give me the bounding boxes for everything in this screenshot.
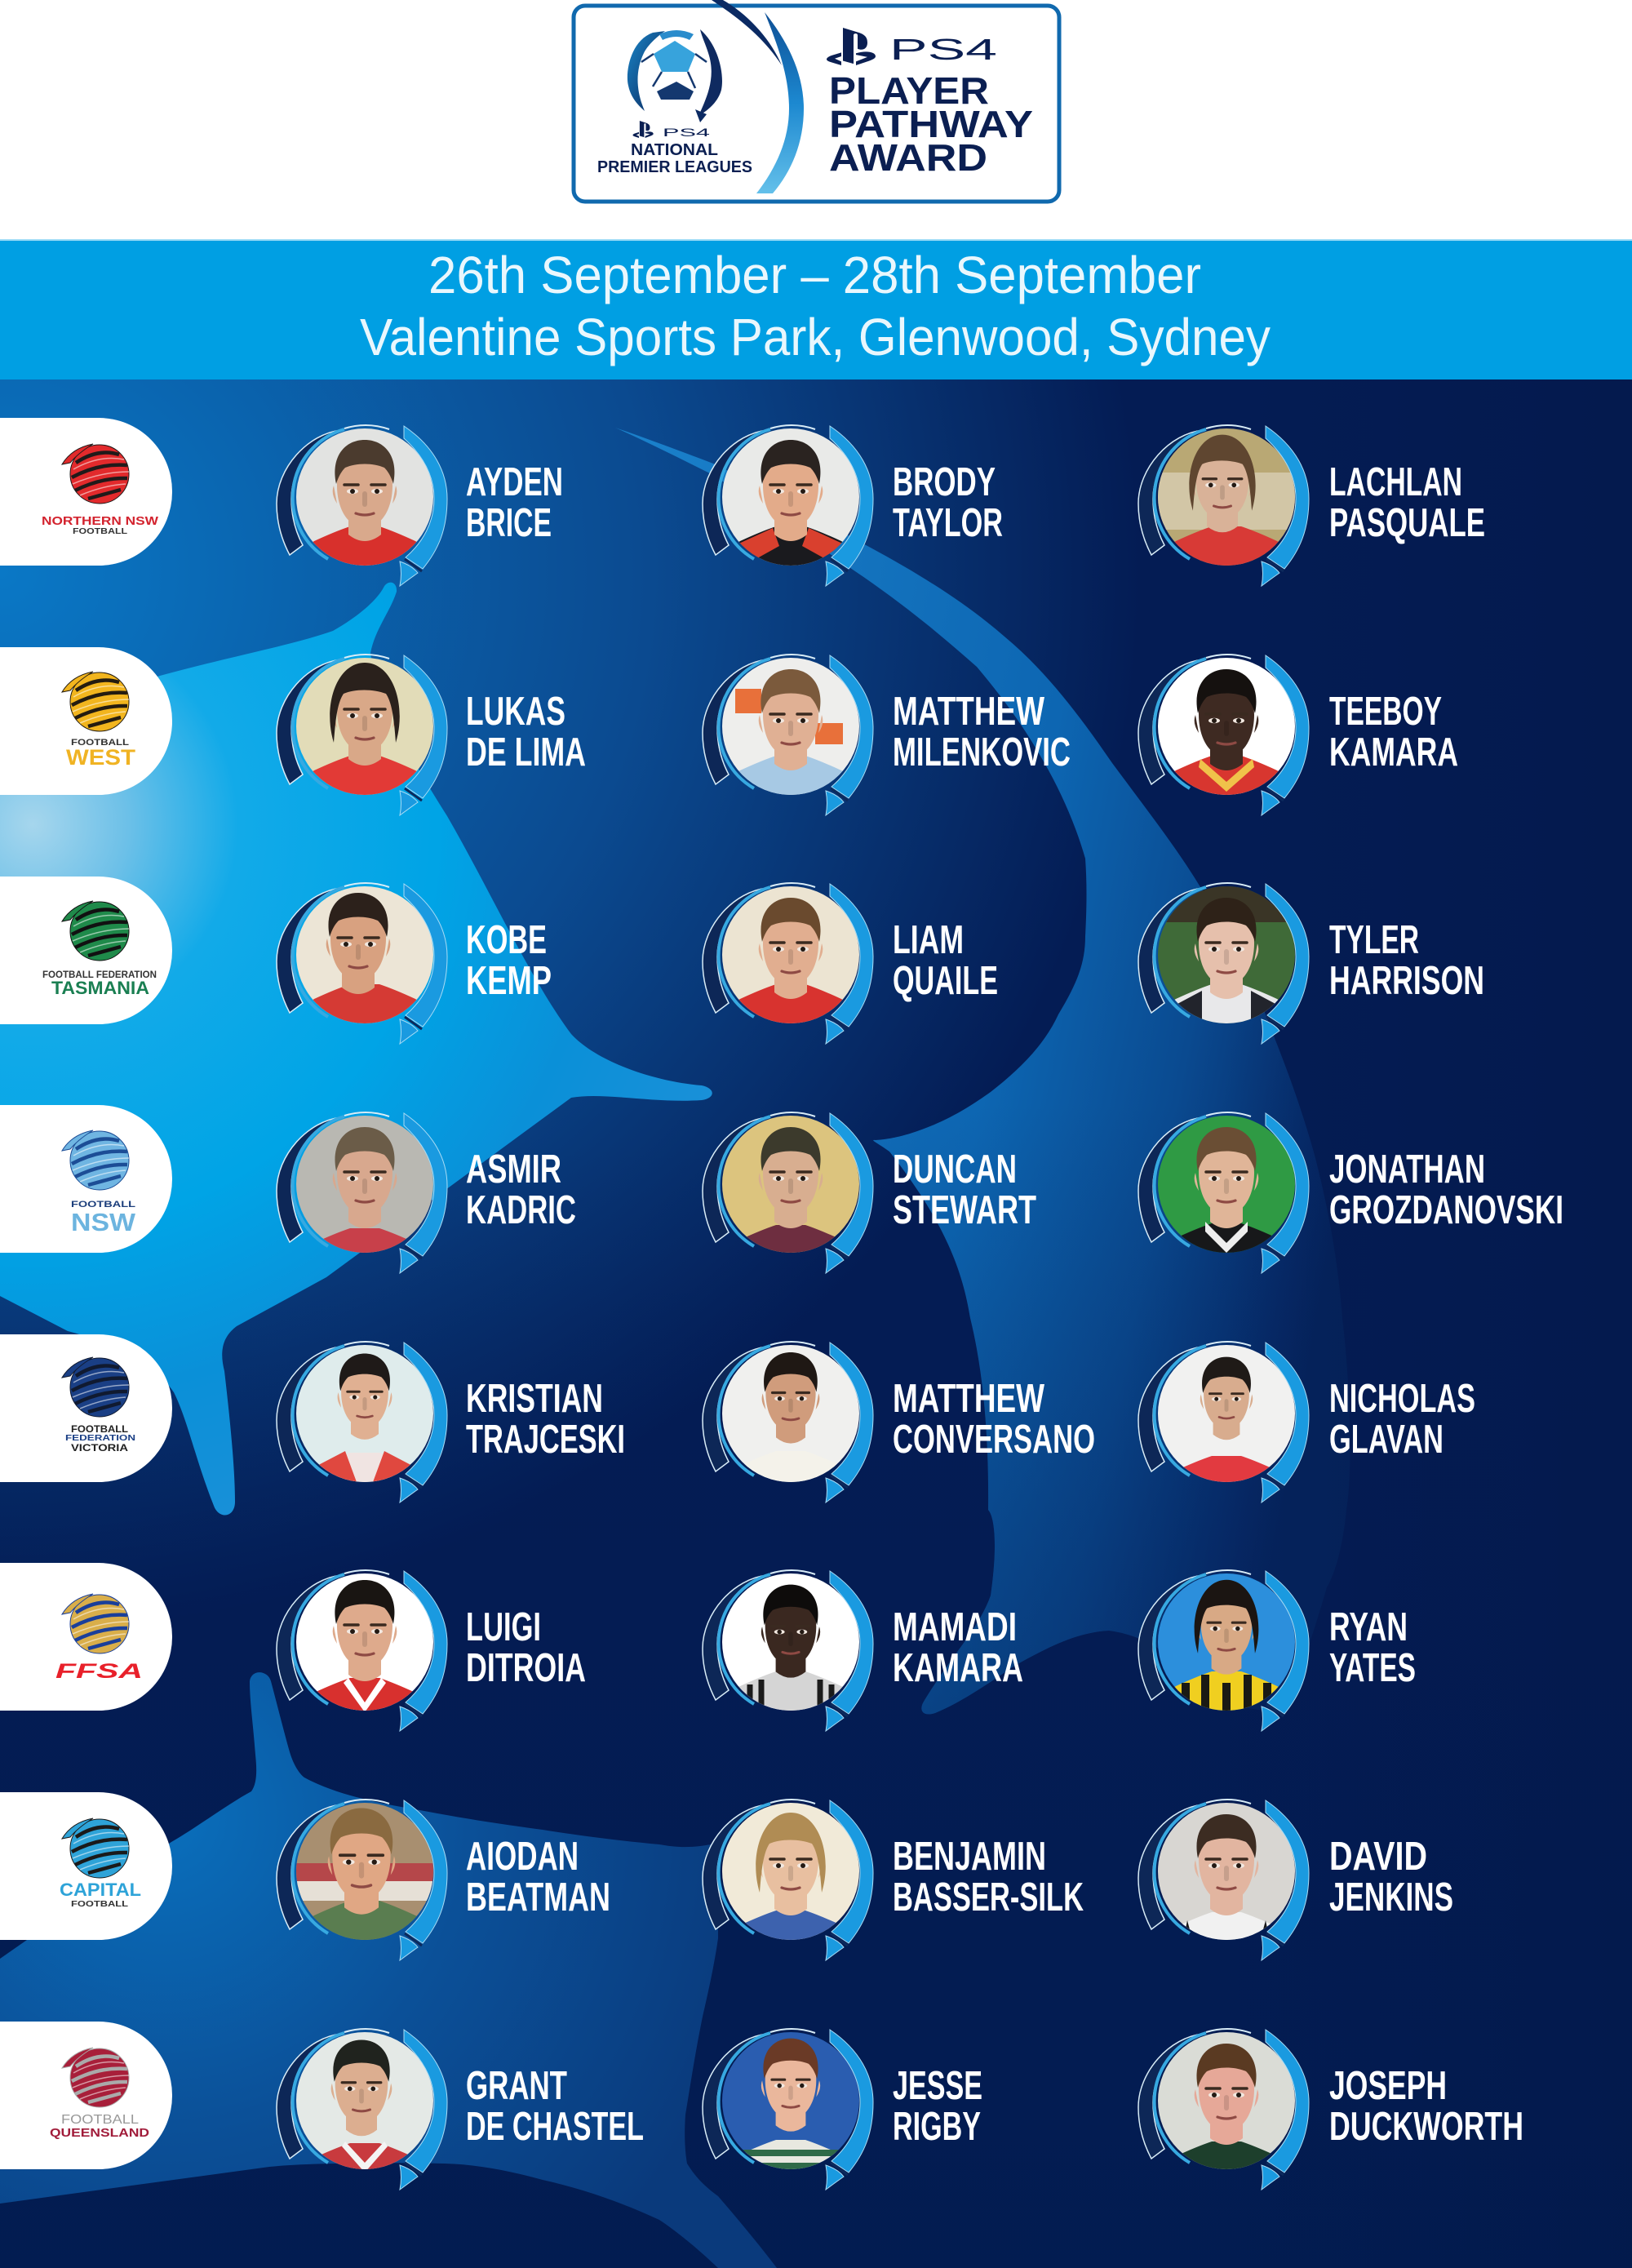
portrait bbox=[277, 424, 447, 586]
player: Joseph Duckworth bbox=[1138, 2027, 1523, 2190]
name: LIAM bbox=[893, 918, 964, 962]
portrait bbox=[703, 1798, 873, 1960]
player: Brody Taylor bbox=[703, 424, 1003, 586]
federation: Football Federation Victoria: FEDERATION bbox=[65, 1434, 135, 1443]
player: Lukas De Lima bbox=[277, 653, 586, 815]
name: MILENKOVIC bbox=[893, 730, 1071, 774]
name bbox=[466, 918, 552, 1003]
player: Lachlan Pasquale bbox=[1138, 424, 1485, 586]
name: KADRIC bbox=[466, 1188, 576, 1232]
portrait bbox=[1138, 653, 1309, 815]
name: MATTHEW bbox=[893, 690, 1045, 734]
player: Jesse Rigby bbox=[703, 2027, 982, 2190]
federation: Northern NSW Football bbox=[0, 418, 172, 566]
federation: Football NSW: FOOTBALL bbox=[71, 1200, 135, 1209]
name: DUNCAN bbox=[893, 1147, 1017, 1192]
player: Tyler Harrison bbox=[1138, 881, 1484, 1044]
name bbox=[466, 2064, 644, 2149]
federation: Northern NSW Football: NORTHERN NSW bbox=[42, 514, 159, 528]
name bbox=[1329, 460, 1485, 545]
name: QUAILE bbox=[893, 959, 998, 1003]
name: LUKAS bbox=[466, 690, 565, 734]
name: AYDEN bbox=[466, 460, 563, 504]
federation: Football Federation Victoria: FOOTBALL bbox=[71, 1423, 128, 1435]
PS4 brand mark: PS4 bbox=[889, 33, 997, 66]
text: National Premier Leagues: PREMIER LEAGUES bbox=[597, 158, 752, 176]
name bbox=[1329, 2064, 1523, 2149]
portrait bbox=[1138, 1111, 1309, 1273]
player: Liam Quaile bbox=[703, 881, 998, 1044]
NPL PS4 mini logo: PS4 bbox=[663, 126, 710, 139]
name bbox=[893, 2064, 982, 2149]
name: HARRISON bbox=[1329, 959, 1484, 1003]
name: STEWART bbox=[893, 1188, 1036, 1232]
portrait bbox=[277, 881, 447, 1044]
federation: Football Federation Tasmania: TASMANIA bbox=[51, 978, 149, 998]
federation: Capital Football: CAPITAL bbox=[60, 1880, 141, 1900]
player: Aiodan Beatman bbox=[277, 1798, 610, 1960]
name: TYLER bbox=[1329, 918, 1419, 962]
name: YATES bbox=[1329, 1646, 1416, 1690]
white header background bbox=[0, 0, 1632, 240]
award title: PATHWAY bbox=[829, 103, 1033, 145]
name bbox=[466, 1377, 625, 1462]
name: ASMIR bbox=[466, 1147, 561, 1192]
name: GRANT bbox=[466, 2064, 567, 2108]
name: GLAVAN bbox=[1329, 1418, 1444, 1462]
federation: FFSA bbox=[0, 1563, 172, 1711]
federation: Northern NSW Football: FOOTBALL bbox=[73, 527, 127, 536]
player: Luigi Ditroia bbox=[277, 1569, 586, 1731]
shape: bright upper left star bbox=[0, 583, 712, 1515]
player: Benjamin Basser-Silk bbox=[703, 1798, 1084, 1960]
name: KEMP bbox=[466, 959, 552, 1003]
name bbox=[1329, 918, 1484, 1003]
name: LUIGI bbox=[466, 1605, 541, 1649]
name bbox=[893, 918, 998, 1003]
name: BEATMAN bbox=[466, 1875, 610, 1920]
name: LACHLAN bbox=[1329, 460, 1462, 504]
name: TRAJCESKI bbox=[466, 1418, 625, 1462]
name: JENKINS bbox=[1329, 1875, 1453, 1920]
player: Kobe Kemp bbox=[277, 881, 552, 1044]
player: Mamadi Kamara bbox=[703, 1569, 1023, 1731]
player: Grant De Chastel bbox=[277, 2027, 644, 2190]
portrait bbox=[703, 1111, 873, 1273]
banner text: dates: 26th September – 28th September bbox=[428, 246, 1201, 304]
name: BASSER-SILK bbox=[893, 1875, 1084, 1920]
federation: Football Queensland: QUEENSLAND bbox=[50, 2126, 149, 2140]
name: JESSE bbox=[893, 2064, 982, 2108]
federation: Football Federation Victoria bbox=[0, 1334, 172, 1482]
name: KAMARA bbox=[893, 1646, 1023, 1690]
portrait bbox=[277, 2027, 447, 2190]
name: DITROIA bbox=[466, 1646, 586, 1690]
name bbox=[893, 1605, 1023, 1690]
federation: Football West: WEST bbox=[66, 745, 136, 770]
federation: Football NSW: NSW bbox=[71, 1208, 136, 1236]
portrait bbox=[1138, 1798, 1309, 1960]
name: MATTHEW bbox=[893, 1377, 1045, 1421]
name: NICHOLAS bbox=[1329, 1377, 1475, 1421]
name: KRISTIAN bbox=[466, 1377, 603, 1421]
federation: Football Queensland: FOOTBALL bbox=[61, 2113, 139, 2127]
player: Matthew Milenkovic bbox=[703, 653, 1071, 815]
logo swoosh divider bbox=[712, 0, 804, 193]
portrait bbox=[1138, 1340, 1309, 1502]
portrait bbox=[277, 1569, 447, 1731]
name bbox=[1329, 1835, 1453, 1920]
portrait bbox=[703, 1569, 873, 1731]
name: TEEBOY bbox=[1329, 690, 1442, 734]
player: Teeboy Kamara bbox=[1138, 653, 1458, 815]
federation: Football Federation Tasmania: FOOTBALL FEDERATION bbox=[42, 969, 157, 980]
name bbox=[893, 690, 1071, 774]
player: Ayden Brice bbox=[277, 424, 563, 586]
portrait bbox=[277, 653, 447, 815]
NPL PS4 mini logo bbox=[632, 121, 710, 139]
name: RYAN bbox=[1329, 1605, 1408, 1649]
player: Asmir Kadric bbox=[277, 1111, 576, 1273]
PS4 brand mark bbox=[827, 28, 997, 66]
portrait bbox=[1138, 881, 1309, 1044]
player: Jonathan Grozdanovski bbox=[1138, 1111, 1563, 1273]
portrait bbox=[703, 881, 873, 1044]
award title: AWARD bbox=[829, 136, 987, 179]
name bbox=[893, 460, 1003, 545]
portrait bbox=[277, 1340, 447, 1502]
name: PASQUALE bbox=[1329, 501, 1485, 545]
name bbox=[893, 1377, 1095, 1462]
text: National Premier Leagues: NATIONAL bbox=[631, 141, 718, 159]
name: DE CHASTEL bbox=[466, 2105, 644, 2149]
federation: Football NSW bbox=[0, 1105, 172, 1253]
shape: lower left star arm bbox=[0, 1672, 777, 2268]
award title: PLAYER bbox=[829, 69, 989, 112]
name: JOSEPH bbox=[1329, 2064, 1447, 2108]
name bbox=[893, 1147, 1036, 1232]
shape: large right crescent bbox=[615, 428, 1350, 1714]
name: TAYLOR bbox=[893, 501, 1003, 545]
name: KOBE bbox=[466, 918, 547, 962]
name bbox=[1329, 690, 1458, 774]
name: KAMARA bbox=[1329, 730, 1458, 774]
federation: Football Federation Victoria: VICTORIA bbox=[71, 1442, 128, 1454]
federation: Football West bbox=[0, 647, 172, 795]
name bbox=[466, 1605, 586, 1690]
federation: Football Federation Tasmania bbox=[0, 877, 172, 1024]
name: AIODAN bbox=[466, 1835, 579, 1879]
panel: state federation logos bbox=[0, 418, 172, 2169]
name: DUCKWORTH bbox=[1329, 2105, 1523, 2149]
federation: Football West: FOOTBALL bbox=[71, 738, 129, 748]
shape: crescent lower shading bbox=[615, 428, 1350, 1714]
name: DAVID bbox=[1329, 1835, 1427, 1879]
name: DE LIMA bbox=[466, 730, 586, 774]
portrait bbox=[1138, 1569, 1309, 1731]
name bbox=[1329, 1605, 1416, 1690]
name bbox=[1329, 1147, 1563, 1232]
name bbox=[466, 460, 563, 545]
portrait bbox=[277, 1111, 447, 1273]
name bbox=[1329, 1377, 1475, 1462]
portrait bbox=[1138, 2027, 1309, 2190]
player: Duncan Stewart bbox=[703, 1111, 1036, 1273]
portrait bbox=[703, 424, 873, 586]
name bbox=[466, 1147, 576, 1232]
portrait bbox=[277, 1798, 447, 1960]
portrait bbox=[1138, 424, 1309, 586]
icon: football emblem bbox=[628, 29, 722, 122]
player: Ryan Yates bbox=[1138, 1569, 1416, 1731]
federation: Football Queensland bbox=[0, 2022, 172, 2169]
banner text: venue: Valentine Sports Park, Glenwood, Sydney bbox=[360, 308, 1271, 366]
name: BRICE bbox=[466, 501, 552, 545]
player: Matthew Conversano bbox=[703, 1340, 1095, 1502]
portrait bbox=[703, 1340, 873, 1502]
name: CONVERSANO bbox=[893, 1418, 1095, 1462]
name: MAMADI bbox=[893, 1605, 1017, 1649]
player: Nicholas Glavan bbox=[1138, 1340, 1475, 1502]
name bbox=[466, 690, 586, 774]
name bbox=[893, 1835, 1084, 1920]
portrait bbox=[703, 2027, 873, 2190]
logo: PS4 Player Pathway Award lockup bbox=[574, 0, 1059, 202]
text: National Premier Leagues bbox=[597, 141, 752, 176]
banner: date and venue bbox=[0, 239, 1632, 379]
name: BENJAMIN bbox=[893, 1835, 1046, 1879]
player: Kristian Trajceski bbox=[277, 1340, 625, 1502]
federation: Capital Football bbox=[0, 1792, 172, 1940]
player: David Jenkins bbox=[1138, 1798, 1453, 1960]
name: JONATHAN bbox=[1329, 1147, 1485, 1192]
award title bbox=[829, 69, 1033, 179]
federation: FFSA: FFSA bbox=[55, 1660, 143, 1683]
name: RIGBY bbox=[893, 2105, 981, 2149]
name: BRODY bbox=[893, 460, 996, 504]
federation: Capital Football: FOOTBALL bbox=[71, 1900, 128, 1909]
portrait bbox=[703, 653, 873, 815]
name bbox=[466, 1835, 610, 1920]
